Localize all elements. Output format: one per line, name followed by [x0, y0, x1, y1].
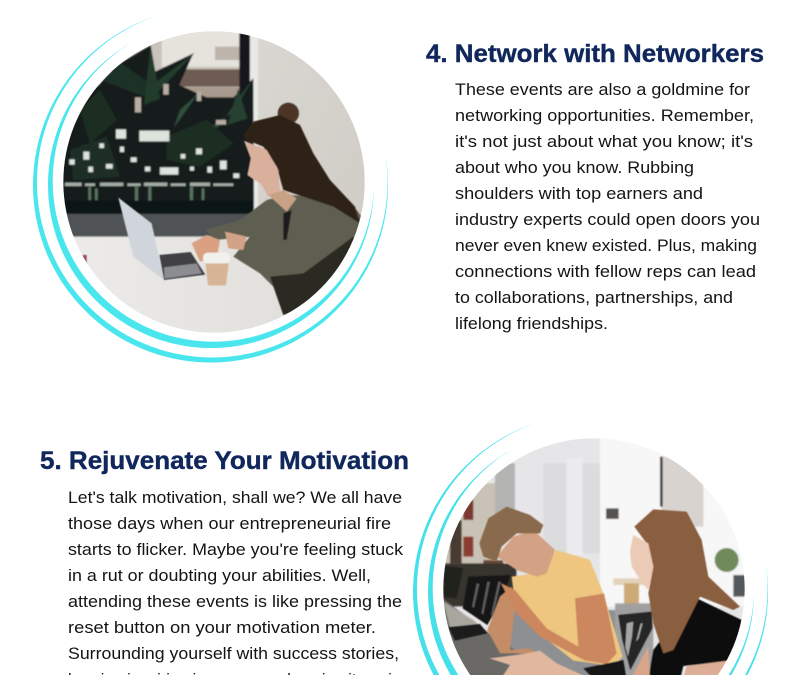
section 5: body text: reset button on your motivation meter. — [68, 618, 376, 637]
hands — [192, 235, 220, 262]
section 5: body text: in a rut or doubting your abilities. Well, — [68, 566, 371, 585]
mug on the table edge — [83, 255, 87, 263]
hair — [278, 103, 299, 124]
section 5: body text: Let's talk motivation, shall we? We all have — [68, 488, 402, 507]
cyan ring outer, section 5 — [413, 423, 768, 675]
section 5: body text: Surrounding yourself with success stories, — [68, 644, 399, 663]
section 4: body text: never even knew existed. Plus, making — [455, 236, 757, 255]
woman in yellow: raised arm — [501, 583, 617, 664]
woman in yellow: hair — [479, 507, 543, 562]
coffee cup — [205, 263, 229, 285]
section 5: body text: those days when our entrepreneurial fire — [68, 514, 391, 533]
section 4: body text: These events are also a goldmine for — [455, 80, 750, 99]
cyan ring inner, section 5 — [428, 451, 754, 675]
woman in black: shirt — [648, 597, 742, 675]
section 5: body text: attending these events is like pressing the — [68, 592, 402, 611]
photo: two women talking at a table — [440, 433, 750, 675]
section 5: heading: 5. Rejuvenate Your Motivation — [40, 447, 409, 475]
section 4: body text — [455, 80, 760, 333]
woman in yellow: waist — [583, 660, 627, 675]
section 4: body text: lifelong friendships. — [455, 314, 608, 333]
section 4: body text: industry experts could open doors you — [455, 210, 760, 229]
laptop — [118, 198, 164, 280]
torso and shirt — [205, 195, 367, 315]
notebook on table — [448, 624, 487, 641]
section 4: body text: shoulders with top earners and — [455, 184, 703, 203]
section 4: body text: to collaborations, partnerships, and — [455, 288, 733, 307]
cyan ring inner, section 4 — [48, 44, 374, 348]
photo: woman working on laptop — [60, 27, 370, 337]
chairs — [443, 566, 463, 598]
woman in black: face — [630, 535, 653, 590]
woman in yellow: neck and face — [497, 530, 555, 577]
section 4: heading: 4. Network with Networkers — [426, 40, 764, 68]
woman in yellow: shirt — [512, 550, 623, 666]
woman in black: hair — [634, 509, 740, 653]
face — [244, 141, 280, 197]
woman in black: hand over the table — [489, 651, 593, 675]
woman in yellow: left arm — [487, 587, 540, 653]
section 4: body text: it's not just about what you know; it's — [455, 132, 753, 151]
section 5: body text: starts to flicker. Maybe you're feeling stuck — [68, 540, 404, 559]
section 4: photo with rings — [33, 16, 388, 363]
section 4: body text: networking opportunities. Remember, — [455, 106, 754, 125]
section 5: photo with rings — [413, 423, 768, 675]
cyan ring outer, section 4 — [33, 16, 388, 363]
section 4: body text: connections with fellow reps can lead — [455, 262, 756, 281]
section 4: body text: about who you know. Rubbing — [455, 158, 694, 177]
section 5: body text — [68, 488, 404, 675]
